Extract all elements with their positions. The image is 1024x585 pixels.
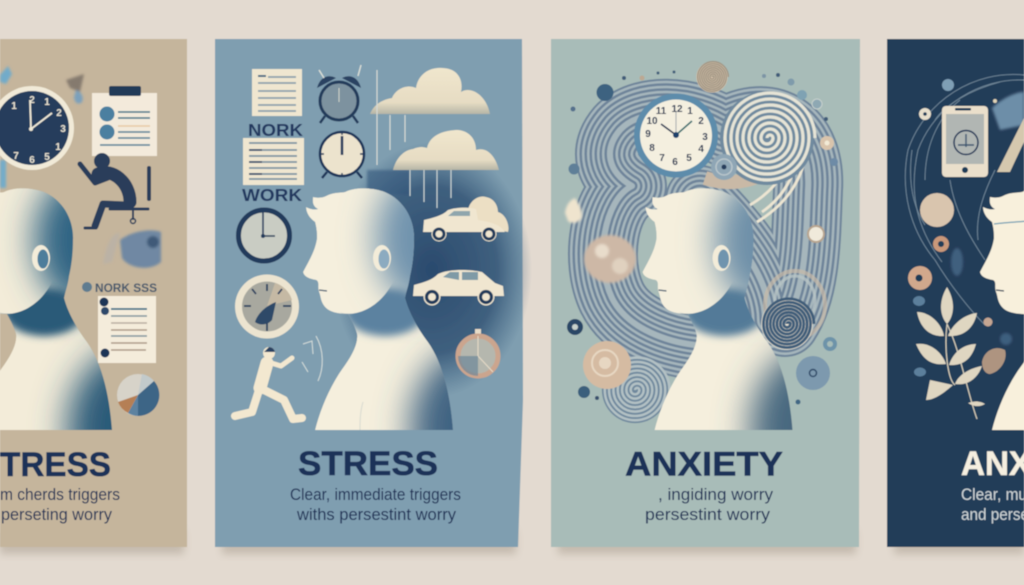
icon: wall clock: 7 (13, 151, 19, 162)
icon: clipboard (92, 86, 157, 156)
wedge (997, 118, 1024, 172)
icon: clock: 1 (687, 106, 693, 117)
panel: stress blue poster (215, 39, 546, 547)
icon: sound arcs (302, 336, 322, 381)
icon: clock: 3 (702, 132, 708, 143)
icon: cloud upper (370, 68, 490, 165)
panel: anxiety poster (551, 39, 886, 547)
icon: running figure (235, 347, 302, 419)
subtitle: Clear, immediate triggers (290, 486, 461, 504)
spiral: lower left (602, 357, 670, 423)
dark shadow behind person (332, 142, 532, 398)
figure: person profile (642, 188, 793, 430)
icon: document top (252, 69, 302, 116)
icon: phone (942, 106, 988, 177)
icon: clock with cream face (320, 131, 364, 178)
panel background (551, 39, 860, 547)
icon: clock: 5 (686, 153, 692, 164)
figure: person profile (0, 188, 112, 430)
panel shadows (0, 530, 1024, 554)
icon: clock: 10 (646, 116, 658, 127)
icon: leaf sprig (916, 287, 985, 419)
icon: round dial (458, 329, 498, 376)
text: WORK: WORK (242, 185, 302, 205)
icon: blue shapes at edge (0, 66, 12, 188)
chart: pie (117, 374, 159, 416)
icon: wall clock: 6 (29, 155, 35, 166)
subtitle: withs persestint worry (296, 506, 457, 524)
text: NORK: NORK (248, 120, 303, 140)
icon: cloud lower (393, 130, 499, 208)
icon: tan disc (583, 341, 631, 389)
figure: person profile (302, 188, 454, 431)
icon: clock: 4 (698, 144, 704, 155)
icon: tan swirl (584, 235, 636, 283)
panel background (215, 39, 523, 547)
icon: seated figure (80, 153, 149, 228)
decorative discs (908, 79, 1012, 376)
panel background (0, 39, 187, 547)
icon: clock grey face (238, 210, 290, 261)
icon: wall clock: 2 (29, 95, 35, 106)
panel: anxiety dark poster (887, 39, 1024, 547)
title: STRESS (298, 445, 438, 483)
icon: clock: 7 (659, 153, 665, 164)
icon: clock: 12 (671, 104, 683, 115)
blurred blue patch (951, 248, 963, 276)
subtitle (645, 486, 774, 524)
icon: wall clock: 1 (55, 142, 61, 153)
subtitle: perseting worry (1, 506, 113, 524)
title: TRESS (0, 446, 111, 484)
subtitle: m cherds triggers (0, 486, 120, 504)
thin hair lines (905, 74, 1024, 325)
icon: wall clock: 2 (56, 108, 62, 119)
icon: blurred machine (103, 230, 161, 268)
figure: person profile (980, 188, 1024, 430)
icon: pale hand (565, 198, 582, 223)
icon: wall clock: 1 (11, 101, 17, 112)
icon: checklist document (98, 296, 156, 363)
icon: tan spiral top (696, 61, 728, 93)
subtitle (961, 486, 1024, 524)
swirling hair mass (603, 114, 808, 345)
icon: clock with shadow (235, 274, 299, 338)
icon: clock: 8 (649, 143, 655, 154)
title: ANXIETY (625, 446, 783, 484)
text: work label: NORK SSS (95, 283, 157, 295)
small spiral under clock (711, 154, 737, 180)
icon: alarm clock (317, 65, 361, 123)
spiral: large (720, 91, 815, 185)
icon: document middle (243, 138, 304, 185)
decorative dots (567, 70, 838, 404)
icon: grey disc (796, 356, 830, 390)
icon: small blurred object (66, 74, 84, 104)
subtitle (290, 486, 461, 524)
icon: wall clock: 1 (44, 97, 50, 108)
icon: clock: 2 (698, 116, 704, 127)
icon: wall clock (0, 86, 74, 170)
tan bands and cream streaks (705, 140, 825, 339)
panel: stress tan poster (0, 39, 207, 547)
blue feather stripes (992, 92, 1024, 130)
icon: clock: 11 (656, 106, 667, 117)
icon: clock: 6 (672, 157, 678, 168)
icon: clock (634, 94, 718, 178)
subtitle: , ingiding worry (658, 486, 774, 504)
panel background (887, 39, 1024, 547)
icon: clock: 9 (645, 129, 651, 140)
subtitle: persestint worry (645, 506, 771, 524)
icon: wall clock: 5 (44, 152, 50, 163)
subtitle (0, 486, 120, 524)
icon: wall clock: 3 (60, 124, 66, 135)
icon: car (413, 270, 504, 306)
icon: car with cloud (423, 197, 509, 242)
spiral: lower right (761, 298, 814, 350)
